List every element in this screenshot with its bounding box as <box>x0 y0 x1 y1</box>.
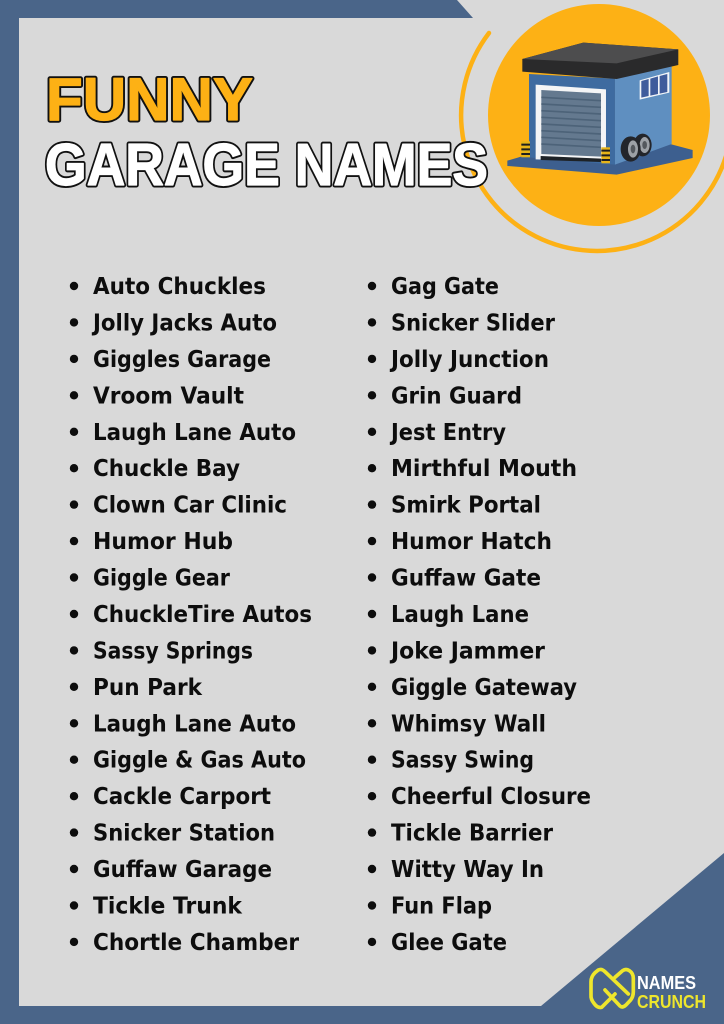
list: left column: ChuckleTire Autos <box>93 602 312 628</box>
list: right column: Fun Flap <box>391 894 492 920</box>
list: right column: Snicker Slider <box>391 310 556 336</box>
list: left column <box>70 274 312 956</box>
logo text: NAMES: NAMES <box>637 973 696 993</box>
list: left column: Cackle Carport <box>93 784 271 810</box>
orange circle <box>488 4 710 226</box>
list: right column: Joke Jammer <box>389 638 546 664</box>
list: left column: Pun Park <box>93 675 203 701</box>
list: left column: Snicker Station <box>93 821 275 847</box>
blue frame: bottom and corner triangle <box>0 853 724 1024</box>
list: right column: Smirk Portal <box>391 493 541 519</box>
list: right column: Whimsy Wall <box>391 711 546 737</box>
list: left column: Giggles Garage <box>93 347 271 373</box>
list: right column: Laugh Lane <box>391 602 529 628</box>
logo: Names Crunch <box>591 969 706 1012</box>
list: left column: Laugh Lane Auto <box>93 711 296 737</box>
list: left column: Auto Chuckles <box>93 274 266 300</box>
list: right column: Jolly Junction <box>389 347 549 373</box>
garage side wall <box>615 63 672 165</box>
list: right column: Glee Gate <box>391 930 507 956</box>
title line 2: GARAGE NAMES <box>45 132 488 198</box>
list: left column: Guffaw Garage <box>93 857 272 883</box>
list: right column: Humor Hatch <box>391 529 552 555</box>
list: left column: Clown Car Clinic <box>93 493 287 519</box>
garage base slab <box>507 144 693 175</box>
title <box>45 66 488 198</box>
list: left column: Jolly Jacks Auto <box>91 310 277 336</box>
title line 2: GARAGE NAMES <box>45 132 488 198</box>
list: right column: Cheerful Closure <box>391 784 591 810</box>
list: right column: Guffaw Gate <box>391 566 541 592</box>
logo text: CRUNCH: CRUNCH <box>637 992 706 1012</box>
tyres <box>621 134 652 162</box>
list: left column: Chuckle Bay <box>93 456 240 482</box>
side windows <box>640 72 669 100</box>
logo mark <box>591 969 633 1007</box>
icon: garage building <box>507 43 693 175</box>
roof <box>522 43 678 79</box>
blue frame: top and left border <box>0 0 473 1006</box>
garage front wall <box>529 74 615 165</box>
list: left column: Vroom Vault <box>93 383 244 409</box>
list: right column: Jest Entry <box>389 420 506 446</box>
list: right column: Grin Guard <box>391 383 522 409</box>
list: right column: Sassy Swing <box>391 748 534 774</box>
list: left column: Giggle Gear <box>93 566 231 592</box>
title line 1: FUNNY <box>46 66 253 133</box>
list: right column: Tickle Barrier <box>391 821 554 847</box>
list: left column: Chortle Chamber <box>93 930 300 956</box>
list: left column: Laugh Lane Auto <box>93 420 296 446</box>
list: left column: Giggle & Gas Auto <box>93 748 306 774</box>
list: right column: Giggle Gateway <box>391 675 577 701</box>
list: right column: Gag Gate <box>391 274 499 300</box>
striped bollards <box>521 141 610 163</box>
roller door <box>536 85 606 162</box>
list: left column: Sassy Springs <box>93 638 253 664</box>
list: left column: Tickle Trunk <box>93 894 243 920</box>
decorative orange ring <box>461 33 724 251</box>
list: right column: Mirthful Mouth <box>391 456 577 482</box>
list: left column: Humor Hub <box>93 529 233 555</box>
list: right column <box>368 274 591 956</box>
list: right column: Witty Way In <box>391 857 544 883</box>
title line 1: FUNNY <box>46 66 253 133</box>
